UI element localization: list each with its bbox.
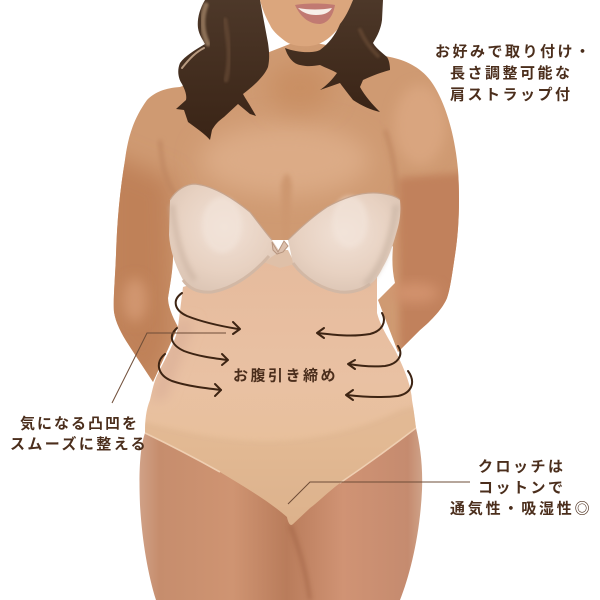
strapless bra — [169, 184, 400, 292]
thigh gap line — [290, 525, 310, 600]
shaper hem trim — [145, 428, 416, 483]
arrow: middle left — [172, 328, 228, 365]
leader line: bumps callout — [112, 333, 226, 403]
arrow: upper right — [317, 313, 384, 338]
shaper shading — [145, 320, 416, 446]
right cup — [288, 193, 400, 292]
center bow — [272, 241, 288, 254]
arrow: upper left — [176, 293, 240, 334]
center band — [263, 250, 295, 268]
callout: smooths bumps: 気になる凸凹を — [20, 414, 139, 432]
arrows: left and right pointing inward — [159, 293, 412, 400]
leader line: crotch callout — [288, 482, 470, 504]
hair highlights — [182, 5, 378, 80]
legs — [140, 428, 422, 600]
smile — [295, 4, 335, 24]
underwire edge — [183, 256, 370, 292]
callout: adjustable shoulder strap: 長さ調整可能な — [450, 64, 573, 82]
arrow: middle right — [348, 346, 400, 369]
callout: adjustable shoulder strap — [435, 44, 593, 104]
left cup — [169, 184, 280, 292]
hair left — [176, 0, 269, 140]
callout: cotton crotch — [450, 458, 592, 518]
model photo illustration — [100, 0, 470, 600]
callout: adjustable shoulder strap: 肩ストラップ付 — [450, 86, 573, 104]
callout: tummy control: お腹引き締め — [233, 368, 338, 384]
callout: cotton crotch: クロッチは — [478, 458, 566, 476]
body shading — [100, 64, 470, 400]
arrow: lower left — [159, 354, 221, 396]
arrow: lower right — [346, 371, 412, 400]
callout: smooths bumps: スムーズに整える — [10, 435, 148, 453]
shaper garment — [145, 262, 416, 525]
face — [260, 0, 353, 46]
body base with arms — [114, 40, 459, 382]
callout: cotton crotch: 通気性・吸湿性◎ — [450, 500, 592, 518]
bra top edge — [170, 184, 400, 240]
callout: adjustable shoulder strap: お好みで取り付け・ — [435, 44, 593, 60]
callout: smooths bumps — [10, 414, 148, 453]
cup shading — [172, 196, 396, 285]
hair right — [285, 0, 390, 112]
callout: cotton crotch: コットンで — [478, 480, 566, 496]
